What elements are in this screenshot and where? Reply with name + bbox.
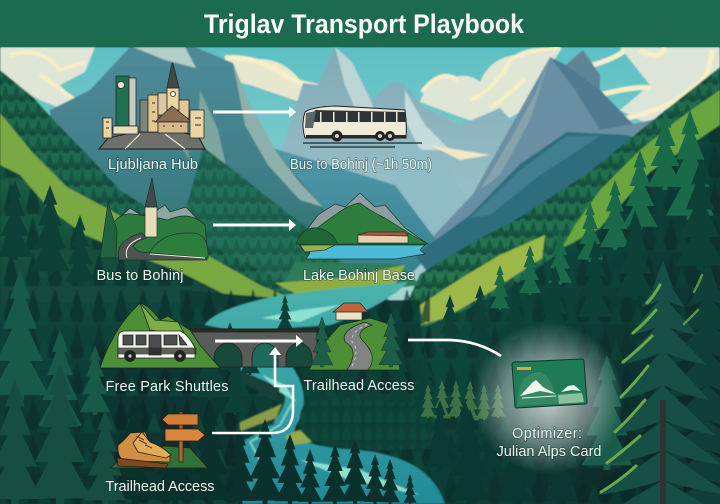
central far peaks (240, 47, 520, 280)
left big mountain (50, 47, 345, 310)
large pine (590, 260, 720, 504)
right big mountain (422, 50, 660, 300)
left forested slope (0, 70, 330, 504)
valley blue (262, 145, 440, 285)
icon: church and road (100, 178, 208, 260)
right forested slope (395, 67, 720, 504)
icon: coach bus (303, 106, 422, 147)
river banks and island forest (299, 394, 440, 450)
icon: trailhead road and cabin (309, 303, 403, 370)
label: Bus to Bohinj with time: Bus to Bohinj (~1h 50m) (290, 157, 432, 173)
title: Triglav Transport Playbook (204, 9, 525, 39)
label: Trailhead Access middle: Trailhead Access (304, 378, 414, 394)
river (205, 282, 445, 504)
mid pine behind glow (582, 355, 632, 470)
label: Optimizer Julian Alps Card: Optimizer: (512, 426, 582, 442)
label: Bus to Bohinj: Bus to Bohinj (96, 268, 184, 284)
foreground pine trees (0, 110, 720, 504)
icon: boots and signpost (110, 412, 208, 468)
label: Lake Bohinj Base: Lake Bohinj Base (303, 268, 415, 284)
header band (0, 0, 720, 47)
label: Optimizer Julian Alps Card: Julian Alps Card (496, 444, 602, 460)
arrow: church to lake (213, 219, 296, 231)
icon: shuttle on green hill (100, 303, 220, 368)
clouds (0, 47, 720, 130)
right mid ridge (415, 132, 650, 290)
icon: Ljubljana city (99, 63, 205, 149)
valley dark forest (180, 290, 430, 504)
arrow: shuttle to trailhead (215, 335, 303, 347)
callout: optimizer card (472, 322, 624, 474)
label: Free Park Shuttles: Free Park Shuttles (106, 379, 228, 395)
mid forest band (100, 350, 240, 504)
label: Trailhead Access bottom: Trailhead Access (106, 479, 214, 495)
arrow: boots up to bridge (212, 347, 293, 433)
left bright meadow band (0, 113, 300, 302)
right dark forest (398, 125, 720, 504)
icon: Lake Bohinj (296, 193, 428, 259)
icon: stone bridge (190, 329, 317, 367)
right bright meadow bands (562, 90, 720, 248)
arrow: city to bus (213, 106, 296, 118)
arrow: trailhead to card (408, 340, 501, 356)
label: Optimizer Julian Alps Card (496, 426, 602, 460)
second large pine (635, 260, 720, 504)
icon: Julian Alps card (512, 359, 587, 408)
label: Ljubljana Hub: Ljubljana Hub (108, 157, 198, 173)
